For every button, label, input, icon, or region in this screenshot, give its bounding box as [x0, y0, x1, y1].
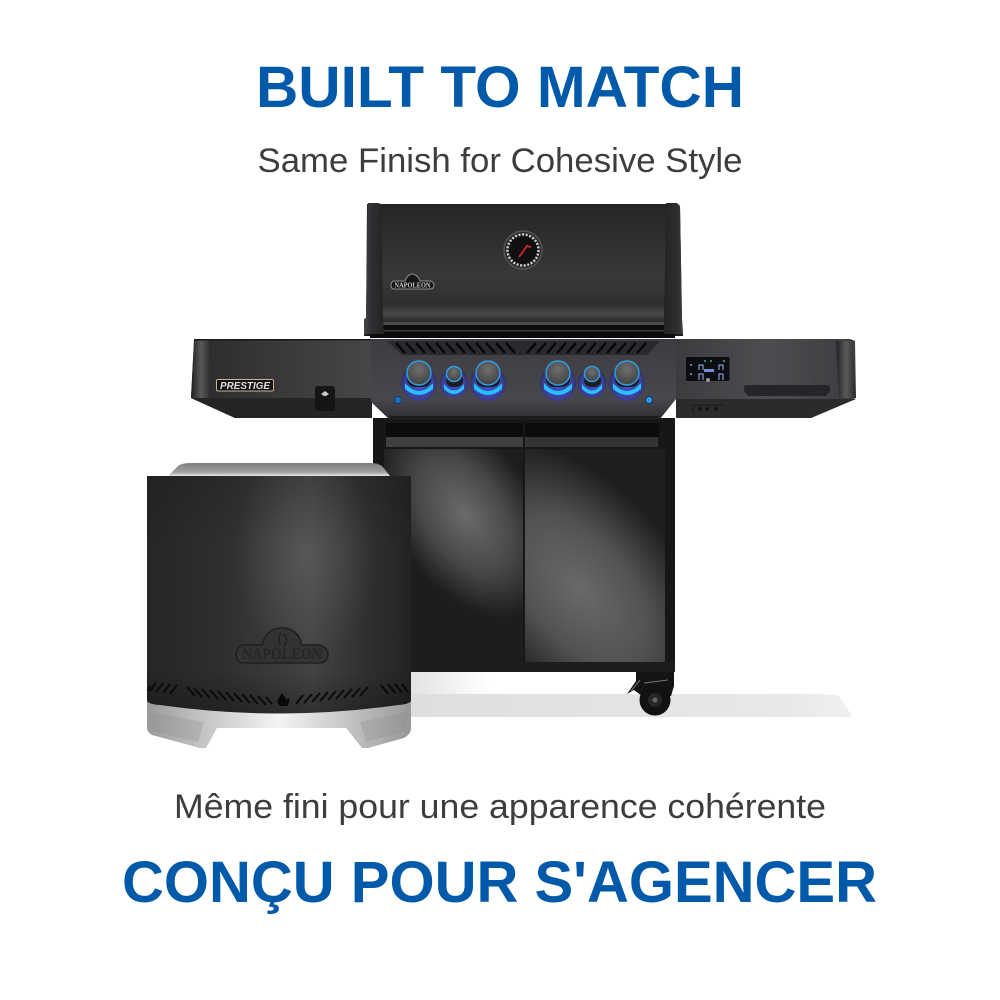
knob 3: [470, 361, 506, 401]
fire pit rim: [168, 463, 390, 476]
embossed Napoleon logo: [236, 628, 328, 663]
fire pit body: [147, 476, 411, 714]
side shelf handle: [315, 386, 335, 411]
subtitle: Same Finish for Cohesive Style: [258, 142, 742, 180]
grill lid: [364, 203, 683, 338]
knob 5: [578, 366, 606, 398]
right cabinet door: [525, 449, 665, 662]
French title: CONÇU POUR S'AGENCER: [122, 850, 877, 915]
vent slats: [387, 341, 660, 355]
knob 6: [609, 361, 645, 401]
Napoleon lid badge: NAPOLEON: [394, 282, 430, 290]
tool bar: [744, 385, 830, 396]
knob 1: [401, 361, 437, 401]
lid end cap right: [664, 203, 683, 334]
fire pit: [147, 463, 411, 748]
caster wheel: [627, 672, 674, 716]
left cabinet door: [384, 449, 523, 662]
Prestige badge: PRESTIGE: [220, 381, 270, 392]
digital display: [686, 357, 730, 382]
storage slot dots: [698, 407, 718, 411]
right indicator light: [646, 396, 652, 404]
floor shade: [410, 672, 490, 694]
right side shelf: [676, 339, 856, 418]
control panel: [371, 339, 676, 420]
lid end cap left: [364, 203, 384, 334]
body vertical shading: [147, 476, 411, 714]
storage slot: [693, 405, 723, 413]
fire pit steel base: [147, 698, 411, 748]
floor shadow: [405, 694, 853, 717]
left indicator light: [394, 396, 402, 404]
knob 4: [540, 361, 576, 401]
body highlight: [147, 476, 411, 714]
title: BUILT TO MATCH: [256, 55, 744, 120]
vent flame icon: [277, 693, 289, 706]
grill cart: [373, 418, 675, 672]
knob 2: [440, 366, 468, 398]
left side shelf: [191, 339, 372, 418]
fire pit vents: [148, 683, 408, 705]
embossed Napoleon logo: NAPOLEON: [242, 646, 322, 663]
base panel shading: [150, 712, 408, 742]
French subtitle: Même fini pour une apparence cohérente: [174, 788, 826, 826]
Napoleon lid badge: [391, 274, 434, 290]
grill: [191, 203, 856, 716]
temperature gauge: [504, 231, 542, 269]
